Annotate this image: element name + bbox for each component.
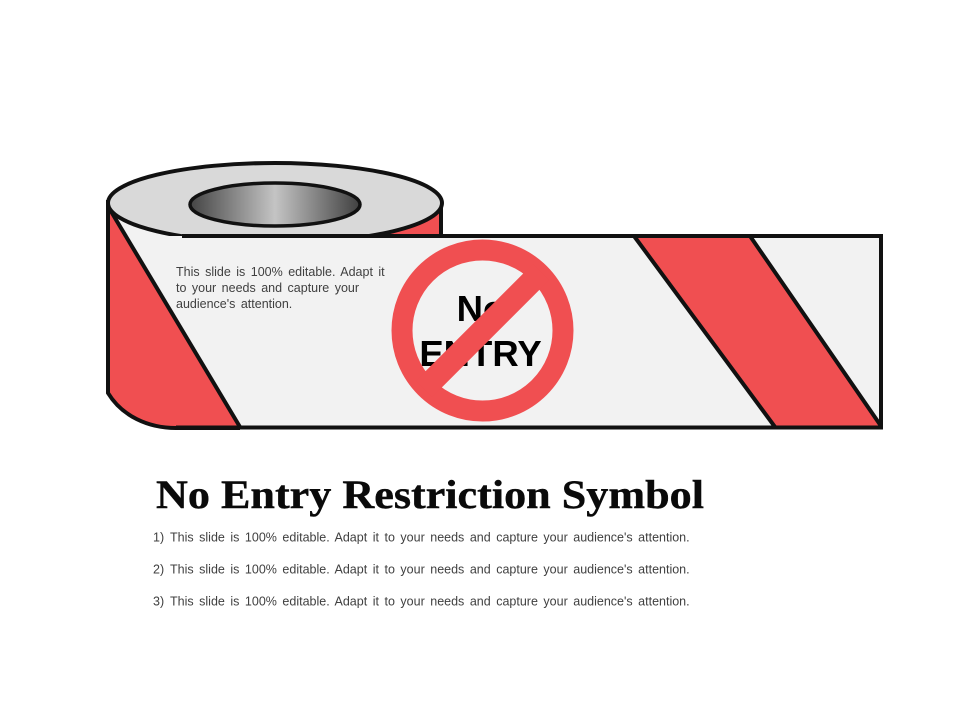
sign wording: No (457, 288, 505, 329)
roll side red fill (108, 203, 441, 428)
tape text block (176, 265, 385, 311)
roll top face (108, 163, 442, 243)
tape roll (108, 200, 441, 428)
tape text block: audience's attention. (176, 297, 292, 311)
numbered list: This slide is 100% editable. Adapt it to your needs and capture your audience's attention. (170, 530, 690, 544)
tape body (109, 208, 881, 428)
numbered list: This slide is 100% editable. Adapt it to your needs and capture your audience's attention. (170, 594, 690, 608)
tape text block: This slide is 100% editable. Adapt it (176, 265, 385, 279)
numbered list: This slide is 100% editable. Adapt it to your needs and capture your audience's attention. (170, 562, 690, 576)
unrolled tape strip (109, 208, 881, 428)
tape text block: to your needs and capture your (176, 281, 359, 295)
list item 3: 3) (153, 594, 164, 608)
red diagonal stripe (634, 236, 881, 428)
left diagonal edge (109, 208, 240, 427)
stripe edges (634, 236, 881, 427)
no entry sign (402, 250, 563, 411)
list item 1: 1) (153, 530, 164, 544)
top ellipse (108, 163, 442, 243)
roll side outline (108, 200, 441, 428)
prohibition ring (402, 250, 563, 411)
numbered list (153, 530, 690, 608)
prohibition slash (424, 272, 541, 389)
sign wording (419, 288, 542, 374)
tape outline (176, 236, 881, 428)
list item 2: 2) (153, 562, 164, 576)
roll core hole (190, 183, 360, 226)
sign wording: ENTRY (419, 333, 542, 374)
title: No Entry Restriction Symbol (156, 472, 704, 517)
